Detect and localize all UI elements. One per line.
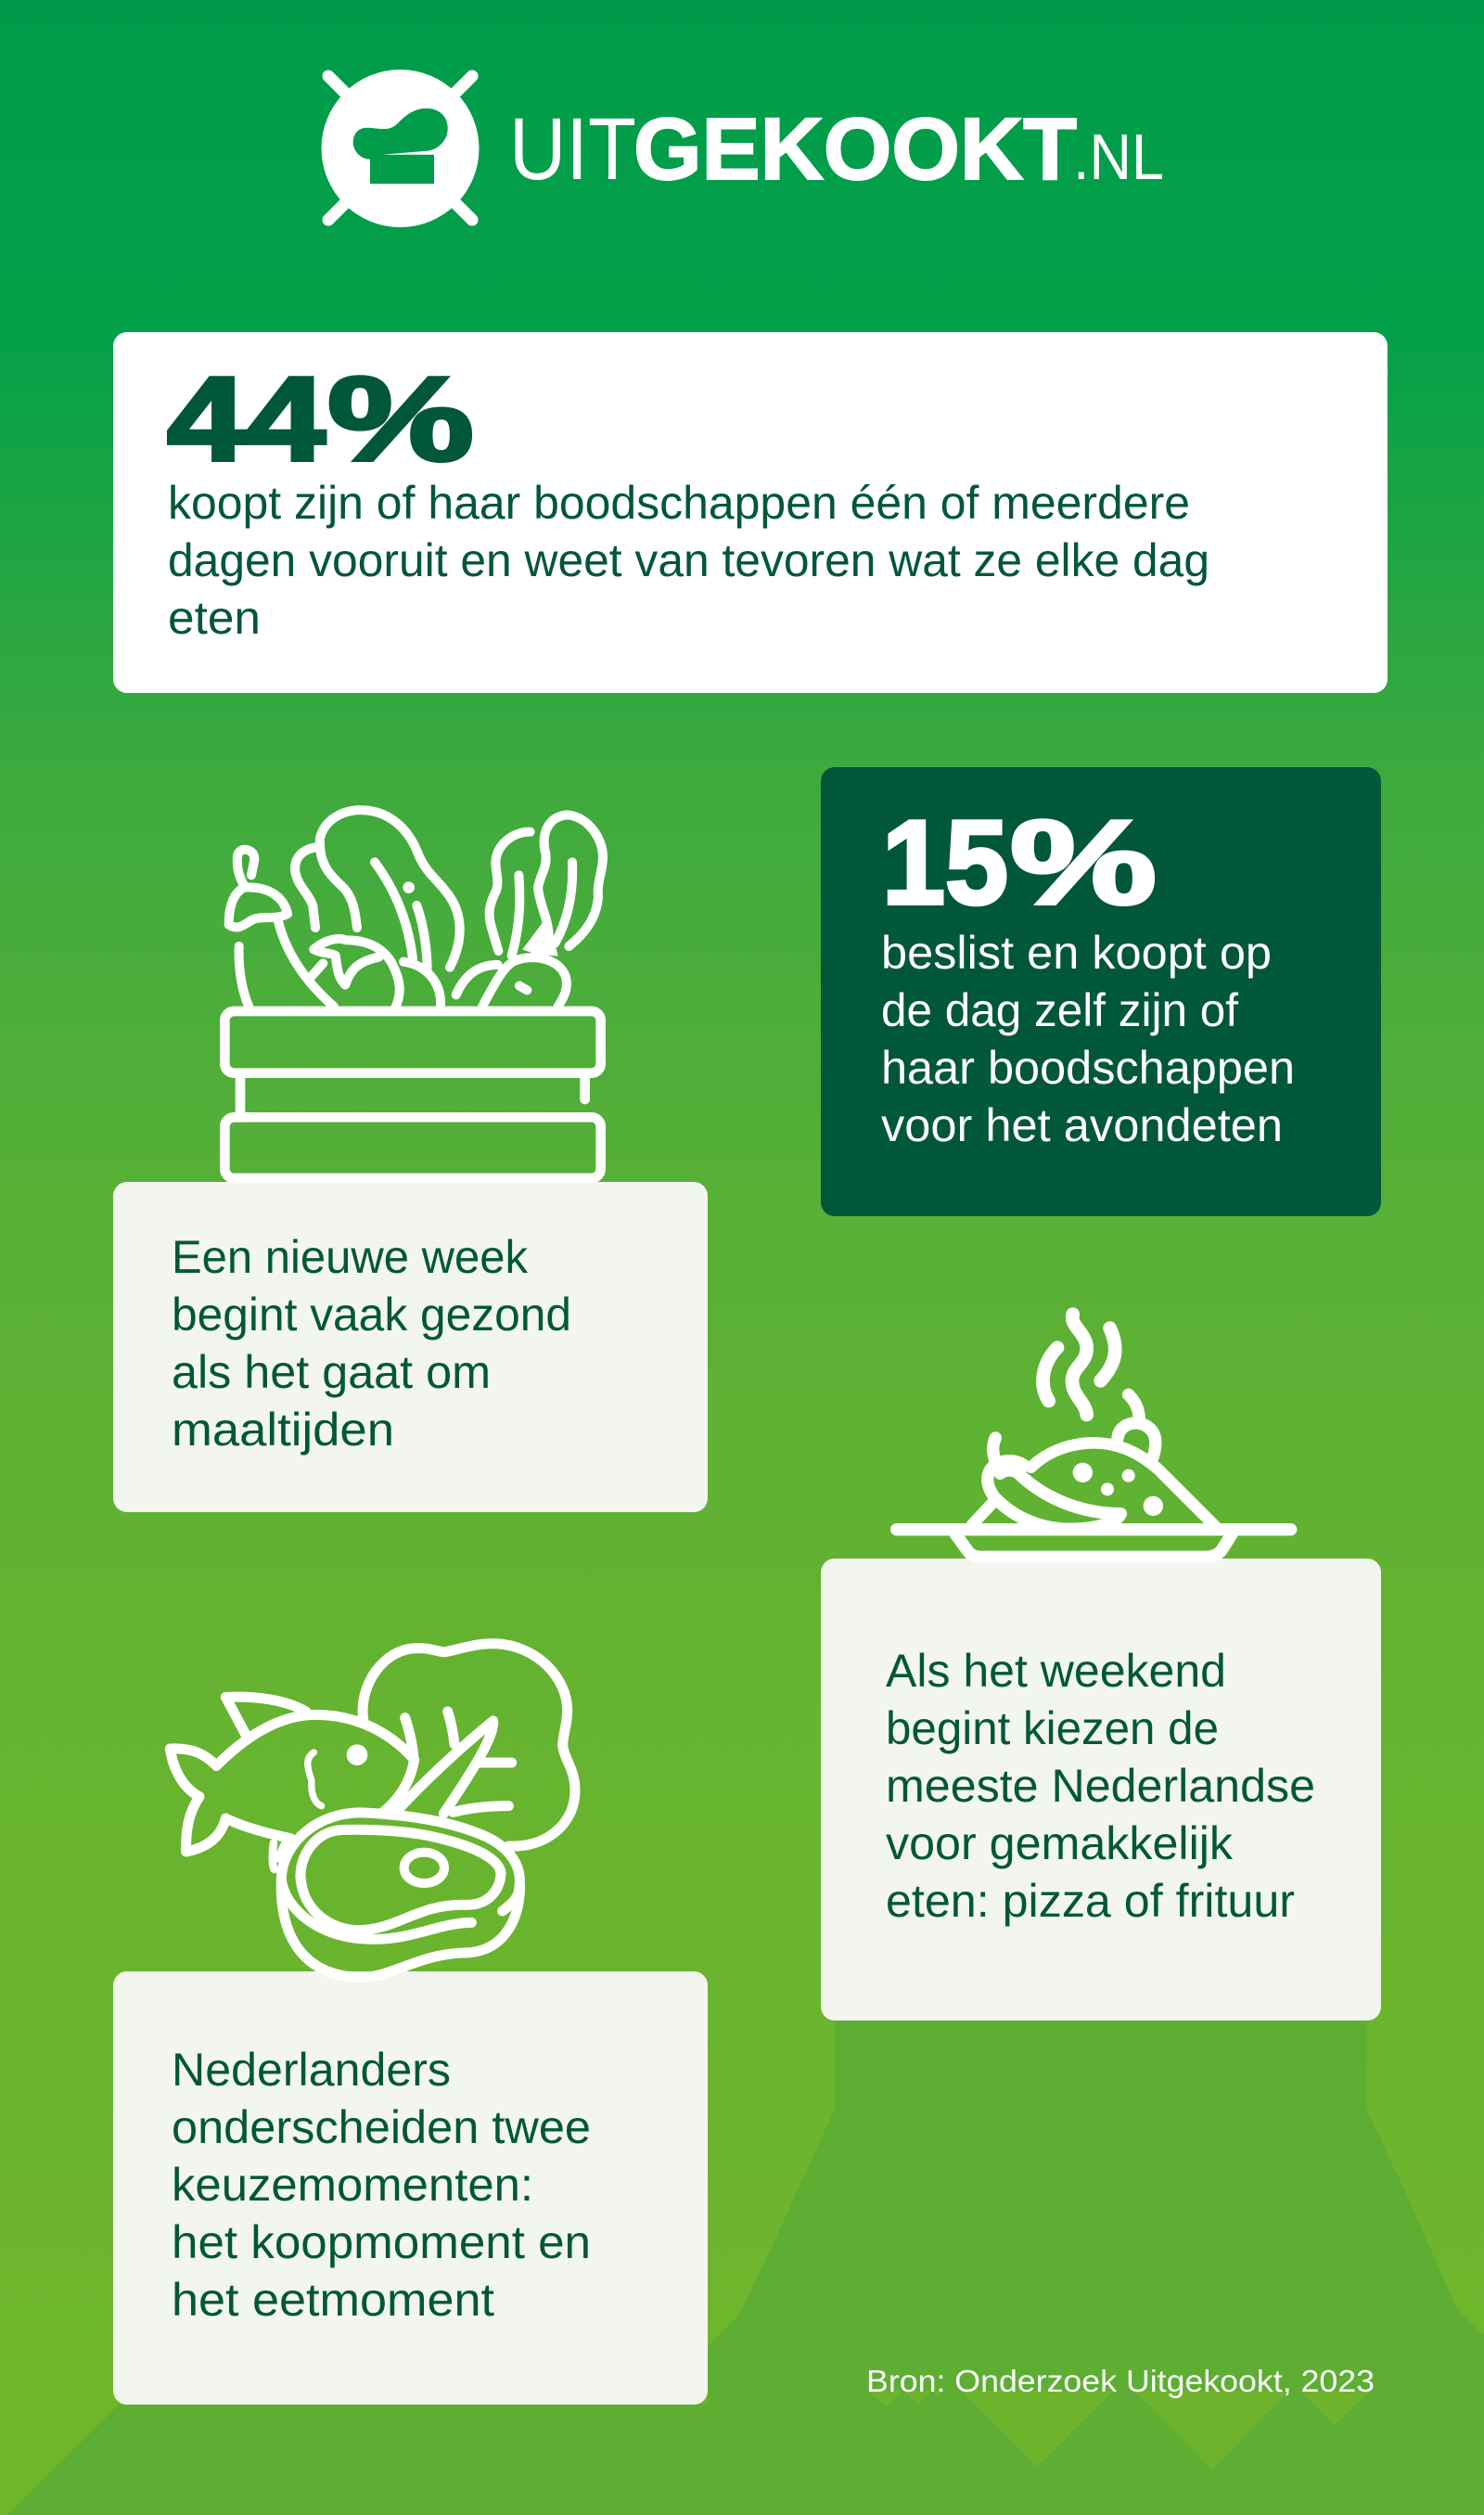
panel: 44%: [113, 332, 1388, 693]
body text: haar boodschappen: [881, 1042, 1295, 1094]
stat: 15%: [882, 796, 1157, 930]
panel: nieuwe week: [113, 1182, 708, 1512]
body text: [172, 1231, 571, 1456]
body text: Als het weekend: [886, 1645, 1226, 1697]
body text: het koopmoment en: [172, 2216, 591, 2268]
body text: Een nieuwe week: [172, 1231, 529, 1283]
stat: 15%: %: [1010, 796, 1157, 930]
stat: 15%: 15: [882, 796, 1008, 930]
icon: vegetable crate: [224, 810, 603, 1178]
stat: 44%: %: [327, 353, 474, 486]
panel: weekend: [821, 1559, 1381, 2021]
wordmark: .NL: [1073, 121, 1164, 193]
wordmark: [509, 100, 1164, 199]
panel: keuzemomenten: [113, 1971, 708, 2405]
icon: hot meal on plate: [897, 1315, 1291, 1557]
icon: fish, lettuce and steak: [170, 1644, 575, 1978]
body text: beslist en koopt op: [881, 927, 1272, 979]
body text: maaltijden: [172, 1404, 394, 1456]
stat: 44%: 44: [167, 353, 326, 486]
icon: pot with chef's hat: [321, 70, 479, 227]
body text: het eetmoment: [172, 2274, 494, 2326]
body text: de dag zelf zijn of: [881, 984, 1238, 1036]
wordmark: GEKOOKT: [633, 100, 1077, 199]
source note: Bron: Onderzoek Uitgekookt, 2023: [866, 2364, 1375, 2398]
body text: voor gemakkelijk: [886, 1817, 1234, 1869]
body text: meeste Nederlandse: [886, 1760, 1315, 1812]
wordmark: UIT: [509, 100, 636, 199]
body text: koopt zijn of haar boodschappen één of meerdere: [168, 477, 1190, 529]
body text: [886, 1645, 1315, 1927]
panel: 15%: [821, 767, 1381, 1216]
body text: eten: pizza of frituur: [886, 1875, 1295, 1927]
body text: begint kiezen de: [886, 1702, 1219, 1754]
body text: dagen vooruit en weet van tevoren wat ze elke dag: [168, 534, 1209, 586]
body text: voor het avondeten: [881, 1099, 1283, 1151]
body text: [168, 477, 1209, 644]
body text: Nederlanders: [172, 2044, 451, 2096]
body text: eten: [168, 592, 261, 644]
body text: [172, 2044, 591, 2326]
body text: [881, 927, 1295, 1151]
stat: 44%: [167, 353, 474, 486]
body text: keuzemomenten:: [172, 2159, 533, 2211]
body text: begint vaak gezond: [172, 1289, 571, 1341]
body text: als het gaat om: [172, 1346, 491, 1398]
background shape: darker silhouette: [7, 2013, 1484, 2515]
body text: onderscheiden twee: [172, 2101, 591, 2153]
logo: Uitgekookt.nl: [321, 70, 1164, 227]
